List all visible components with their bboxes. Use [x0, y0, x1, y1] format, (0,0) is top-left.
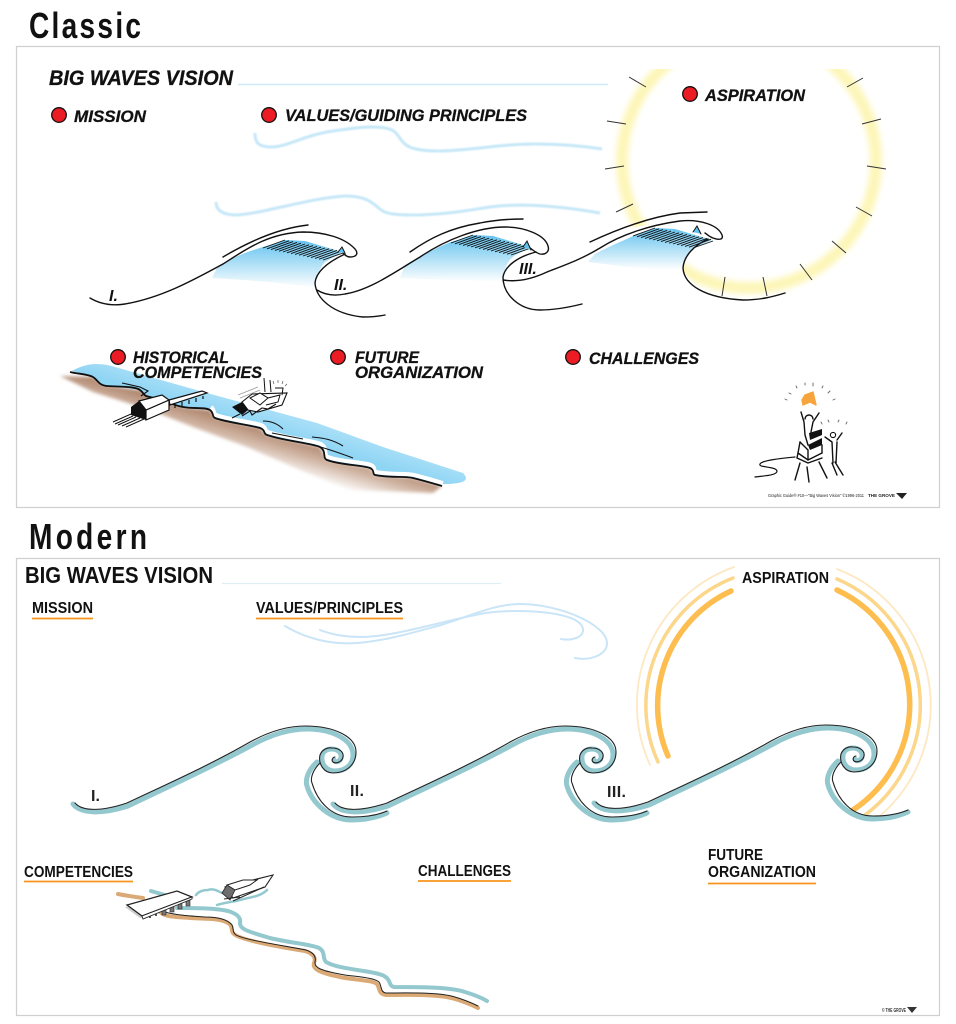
shoreline illustration [118, 891, 487, 1008]
label: future organization: ORGANIZATION [355, 363, 484, 382]
wave I [73, 726, 387, 820]
shoreline illustration [60, 364, 466, 493]
wave I [90, 225, 385, 317]
label: competencies: COMPETENCIES [24, 864, 133, 881]
surf strip [211, 407, 443, 483]
wave cover masking the ring [585, 221, 720, 325]
label: challenges: CHALLENGES [418, 863, 511, 880]
label: future organization: FUTURE [355, 348, 420, 367]
sun rays [605, 77, 886, 296]
label: mission: MISSION [32, 600, 93, 617]
soft wave: values lower [216, 196, 600, 215]
shoreline stroke [70, 372, 442, 486]
wave numerals: III. [519, 261, 537, 278]
label: future organization [708, 847, 816, 884]
wind wave lines [285, 604, 607, 659]
sand line [118, 894, 478, 1008]
icon: modern boat [196, 875, 273, 905]
label: historical competencies: HISTORICAL [133, 348, 229, 367]
label: future organization: FUTURE [708, 847, 763, 864]
label: mission: MISSION [74, 107, 147, 126]
wave numerals: II. [350, 783, 364, 800]
wave III [594, 725, 908, 819]
credit: classic [768, 492, 907, 499]
aspiration sun ring [622, 34, 876, 288]
water ripples [122, 383, 353, 458]
wave numerals: I. [109, 288, 118, 305]
teal water line [151, 891, 487, 1001]
credit: classic: Graphic Guide® #10—"Big Waves Vision" ©1996-2011 [768, 492, 864, 499]
wave numerals: I. [91, 788, 100, 805]
wave numerals [109, 261, 537, 305]
icon: figures with flag on tower [755, 383, 847, 482]
panel: classic template [16, 34, 940, 508]
aspiration rings [637, 567, 931, 815]
wave III [503, 212, 785, 300]
hatching on wave crest II [451, 235, 531, 255]
soft wave: values upper [255, 127, 602, 151]
label: aspiration: ASPIRATION [704, 86, 806, 105]
wave numerals [91, 783, 626, 805]
heading: Classic: Classic [29, 6, 141, 46]
hatching on wave crest I [263, 240, 343, 260]
water [72, 364, 466, 484]
black shore line [165, 912, 478, 1006]
label: historical competencies: COMPETENCIES [133, 363, 263, 382]
credit: classic: THE GROVE [868, 493, 896, 499]
icon: classic boat [232, 378, 287, 418]
wave II [317, 219, 582, 310]
wave II [333, 726, 647, 820]
heading: Modern: Modern [29, 517, 147, 557]
label: historical competencies [111, 348, 263, 382]
blue wave fills [212, 228, 712, 288]
label: values and principles: VALUES/PRINCIPLES [256, 600, 403, 617]
credit: modern: © THE GROVE [882, 1007, 906, 1014]
label: aspiration: ASPIRATION [742, 570, 829, 587]
wave numerals: III. [607, 784, 626, 801]
wave numerals: II. [334, 277, 347, 294]
label: future organization [331, 348, 484, 382]
hatching on wave crest III [633, 228, 713, 248]
label: values and guiding principles: VALUES/GUIDING PRINCIPLES [285, 106, 528, 125]
icon: pier [125, 891, 192, 919]
icon: boathouse and pier [113, 391, 207, 427]
panel: modern template [16, 558, 940, 1016]
sand shadow [60, 376, 442, 493]
title: modern big waves vision: BIG WAVES VISION [25, 562, 213, 588]
label: future organization: ORGANIZATION [708, 864, 816, 881]
title: classic big waves vision: BIG WAVES VISION [49, 67, 234, 90]
label: challenges: CHALLENGES [589, 349, 700, 368]
